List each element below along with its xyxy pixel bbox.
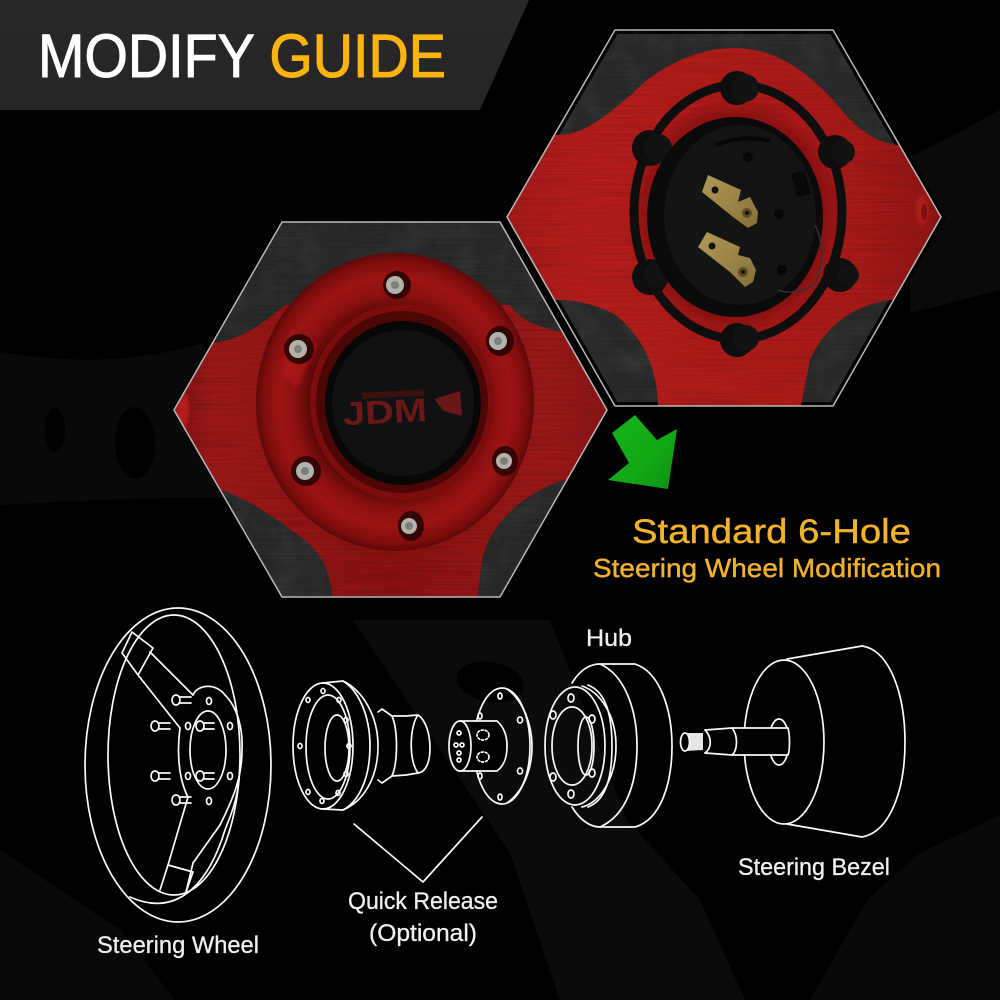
subheading: steering wheel modification: Steering Wheel Modification: [593, 553, 941, 583]
diagram: quick release part two: [449, 688, 532, 804]
title: MODIFY GUIDE: [38, 22, 446, 90]
icon: green arrow: [608, 415, 677, 489]
spoke bottom: [160, 797, 193, 892]
heading: standard 6-hole: Standard 6-Hole: [632, 513, 911, 551]
label: quick release optional: (Optional): [369, 920, 477, 947]
diagram: steering wheel line art: [85, 608, 271, 922]
horn button with JDM logo: [325, 321, 481, 485]
screws: [284, 271, 518, 541]
label: hub: Hub: [586, 625, 632, 652]
diagram: steering bezel with column shaft: [680, 646, 905, 837]
contact base: [647, 117, 823, 317]
panel: hexagon assembled horn button: [170, 220, 612, 600]
diagram: quick release part one: [293, 681, 430, 810]
diagram: hub: [545, 664, 672, 827]
mounting hole: [916, 194, 928, 226]
header banner: [0, 0, 529, 110]
horn ring: [256, 253, 534, 551]
horn button with JDM logo: JDM: [342, 391, 428, 432]
bore: [190, 711, 226, 789]
hub plate: [179, 686, 242, 863]
bracket: quick release pointer: [354, 817, 482, 882]
shadow around base: [635, 105, 835, 329]
spoke top: [122, 632, 193, 728]
rubber ring and grommets: [632, 71, 859, 357]
label: steering bezel: Steering Bezel: [738, 854, 890, 881]
label: quick release optional: Quick Release: [348, 888, 498, 915]
label: quick release optional: [348, 888, 498, 947]
panel: hexagon back of wheel with horn contacts: [500, 28, 945, 410]
gold contact terminals: [698, 175, 758, 287]
screws: [151, 695, 214, 805]
bolt holes: [186, 698, 232, 804]
label: steering wheel: Steering Wheel: [97, 932, 259, 959]
